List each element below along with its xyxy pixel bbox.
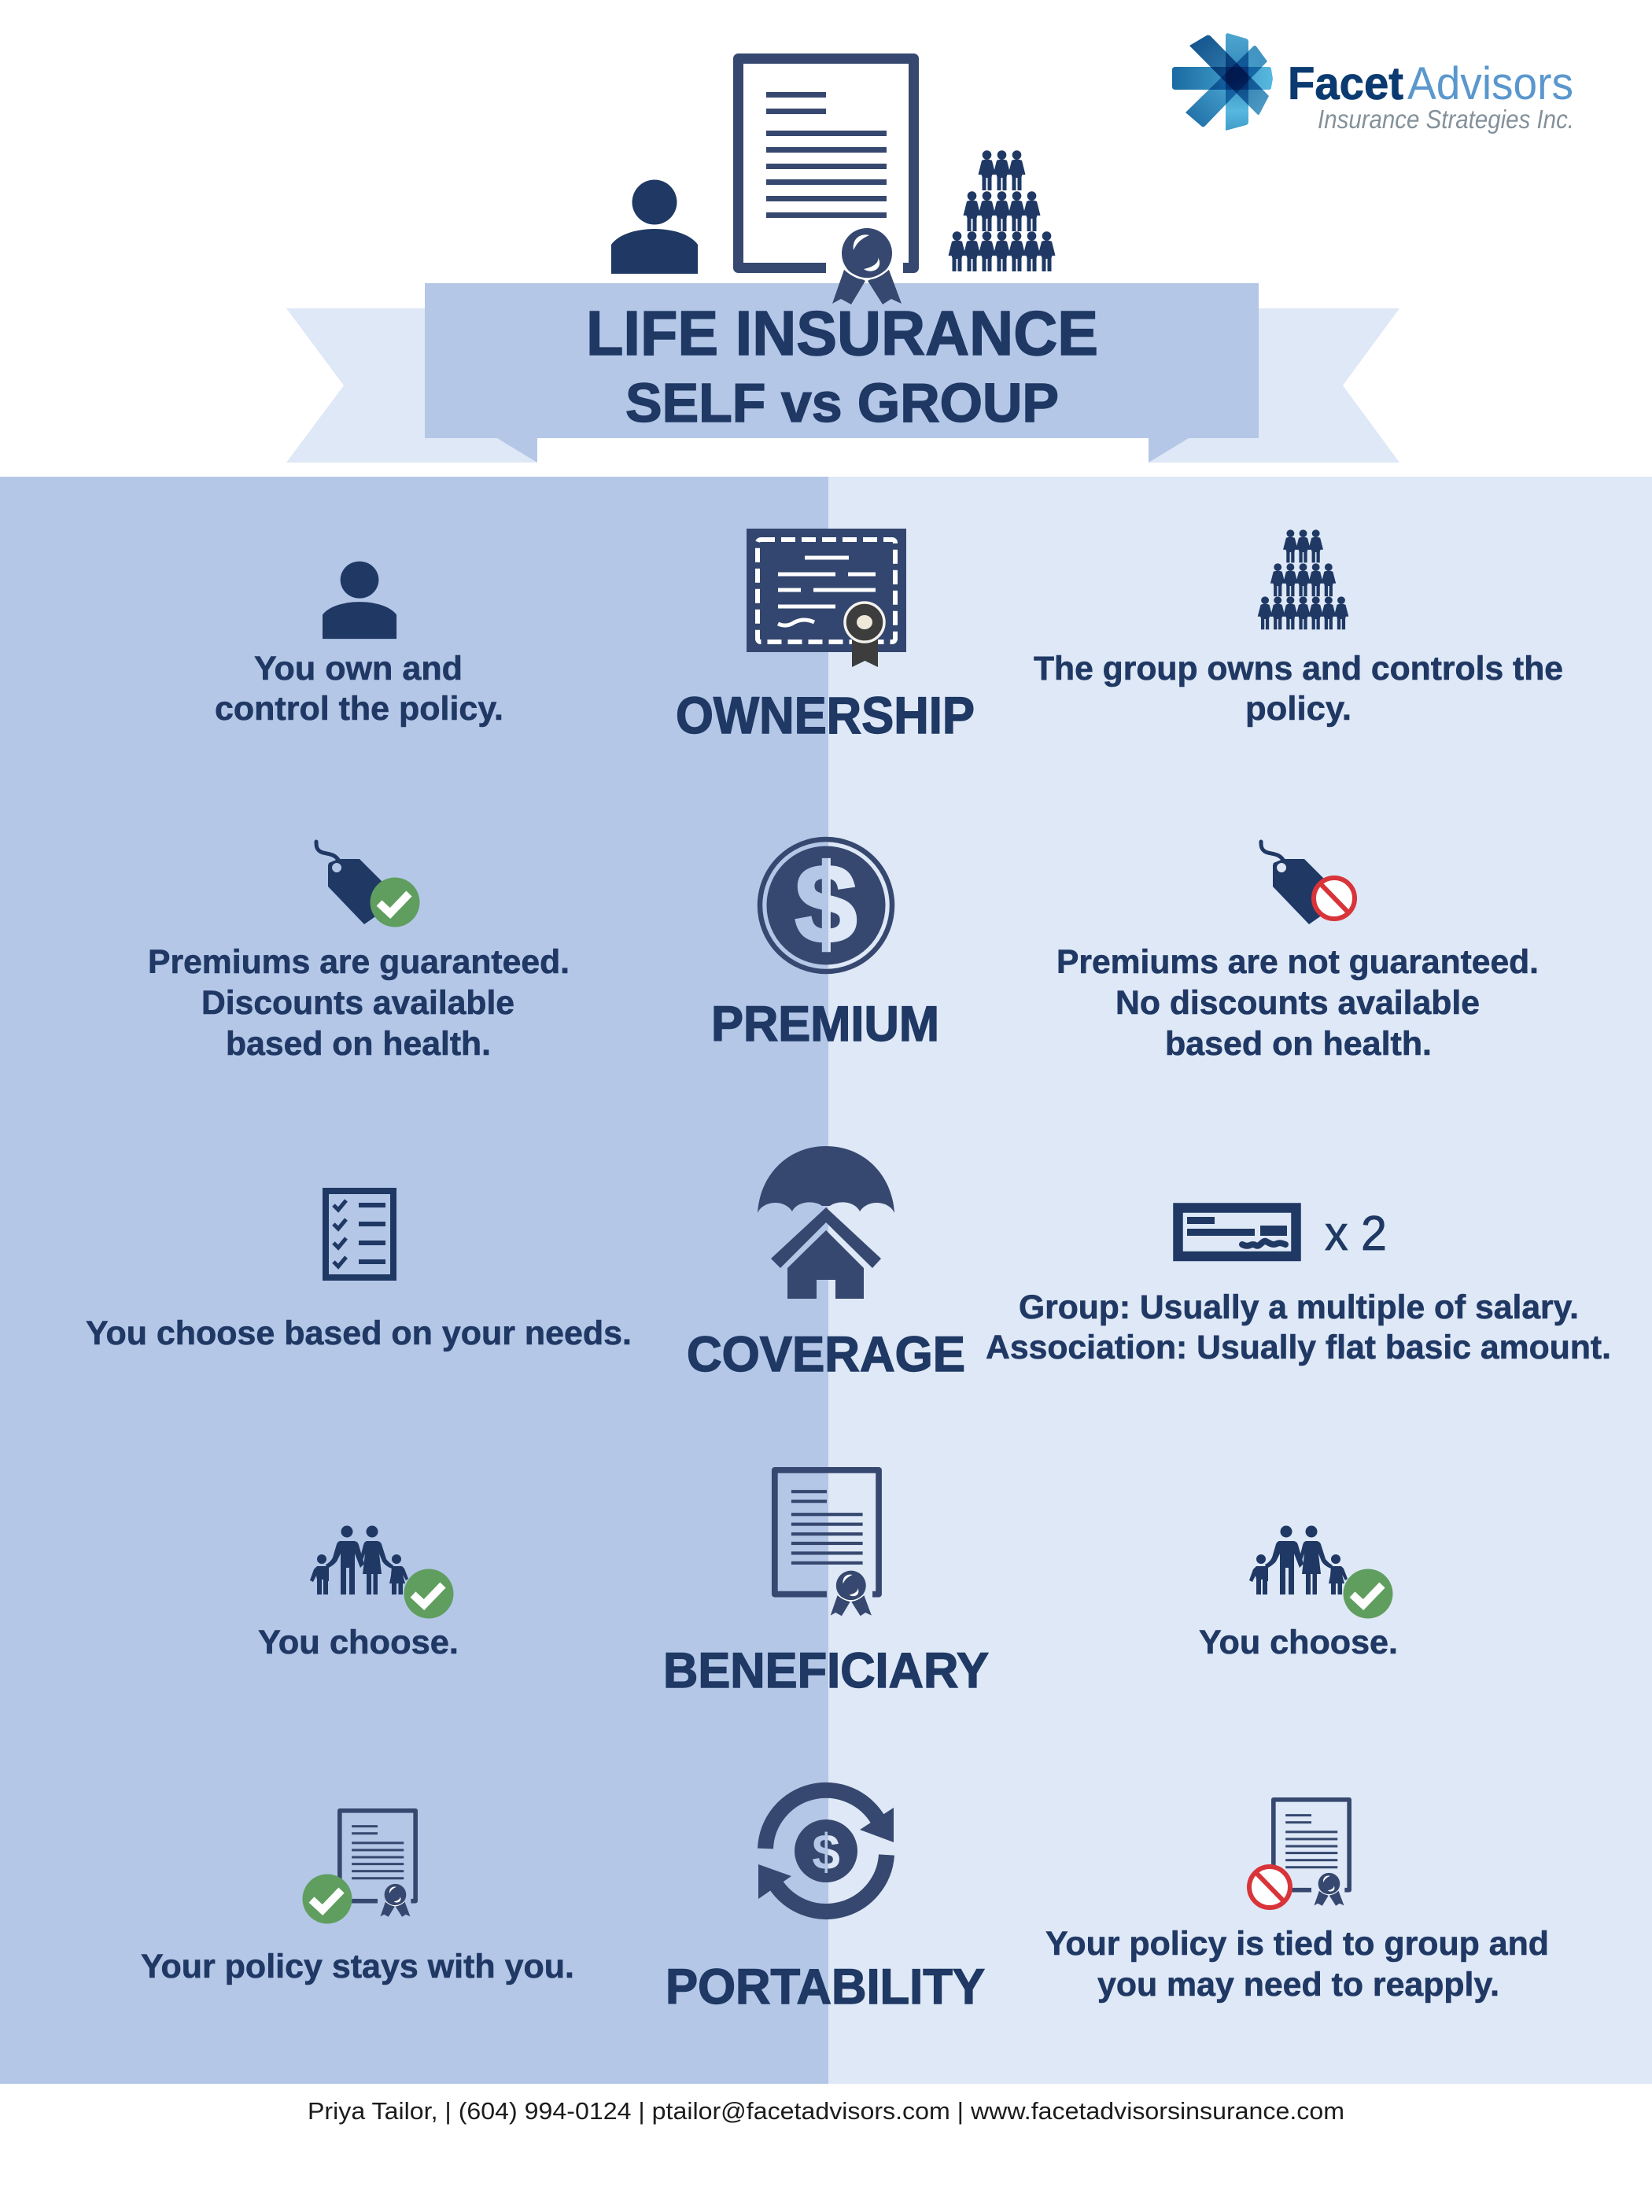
heading: portability: PORTABILITY [666, 1959, 985, 2015]
text: self premium [148, 943, 570, 1063]
icon: family with check [310, 1526, 453, 1619]
heading: coverage: COVERAGE [687, 1327, 965, 1382]
text: group beneficiary: You choose. [1199, 1624, 1398, 1661]
ribbon main [425, 283, 1259, 438]
text: group premium [1056, 943, 1539, 1063]
icon: checklist [326, 1191, 393, 1277]
text: group premium: No discounts available [1115, 984, 1480, 1022]
banner: ribbon [286, 283, 1399, 463]
text: self ownership [215, 650, 503, 728]
icon: policy document [738, 58, 914, 304]
row: premium [148, 839, 1539, 1063]
ribbon folds [497, 438, 1189, 463]
heading: beneficiary: BENEFICIARY [663, 1643, 989, 1698]
icon: family with check [1249, 1526, 1392, 1619]
text: group portability [1045, 1925, 1549, 2004]
text: group ownership: The group owns and controls the [1034, 650, 1563, 688]
text: self ownership: You own and [254, 650, 463, 688]
icon: dollar coin [760, 839, 892, 971]
icon: tag with no sign [1261, 842, 1355, 924]
text: self premium: Discounts available [201, 984, 514, 1022]
row: portability [141, 1790, 1549, 2015]
icon: group pyramid [1258, 529, 1348, 629]
icon: person [611, 179, 698, 274]
text: group coverage: Group: Usually a multiple of salary. [1019, 1288, 1579, 1326]
title: LIFE INSURANCE [586, 298, 1098, 368]
icon: cheque [1178, 1208, 1296, 1256]
text: self premium: based on health. [226, 1025, 491, 1063]
icon: group pyramid [949, 150, 1056, 271]
icon: dollar coin: $ [795, 842, 857, 967]
text: self portability: Your policy stays with you. [141, 1948, 574, 1985]
text: group premium: based on health. [1165, 1025, 1432, 1063]
panel: group (right column) [828, 477, 1652, 2084]
text: group ownership: policy. [1245, 690, 1351, 728]
text: self beneficiary: You choose. [258, 1624, 459, 1661]
row: coverage [86, 1146, 1611, 1382]
logo wordmark light: Advisors [1407, 58, 1573, 109]
text: group coverage [986, 1288, 1611, 1366]
icon: person [323, 562, 396, 639]
text: self ownership: control the policy. [215, 690, 503, 728]
logo: Facet Advisors [1172, 33, 1574, 134]
row: beneficiary [258, 1470, 1398, 1698]
text: self coverage: You choose based on your needs. [86, 1314, 632, 1352]
text: group portability: Your policy is tied to group and [1045, 1925, 1549, 1963]
text: group portability: you may need to reapply. [1097, 1966, 1499, 2004]
subtitle: SELF vs GROUP [625, 372, 1059, 433]
logo tagline: Insurance Strategies Inc. [1318, 105, 1574, 134]
multiplier: x 2 [1325, 1207, 1387, 1261]
heading: ownership: OWNERSHIP [676, 686, 975, 744]
icon: tag with check [316, 842, 420, 927]
icon: portability cycle: $ [812, 1823, 840, 1880]
heading: premium: PREMIUM [711, 997, 939, 1052]
text: group premium: Premiums are not guaranteed. [1056, 943, 1539, 981]
icon: umbrella over house [758, 1146, 894, 1299]
icon: policy document with check [302, 1811, 415, 1924]
ribbon tails [286, 308, 1399, 463]
icon: certificate [747, 529, 906, 667]
icon: policy document [775, 1470, 879, 1616]
logo wordmark: Facet [1288, 58, 1403, 109]
text: group ownership [1034, 650, 1563, 728]
text: group coverage: Association: Usually flat basic amount. [986, 1329, 1611, 1366]
row: ownership [215, 529, 1563, 744]
icon: policy document with no sign [1249, 1800, 1349, 1908]
footer contact line: Priya Tailor, | (604) 994-0124 | ptailor@facetadvisors.com | www.facetadvisorsinsurance.com [308, 2097, 1344, 2125]
icon: portability cycle [758, 1790, 894, 1912]
panel: self (left column) [0, 477, 828, 2084]
text: self premium: Premiums are guaranteed. [148, 943, 570, 981]
logo mark [1172, 33, 1273, 131]
